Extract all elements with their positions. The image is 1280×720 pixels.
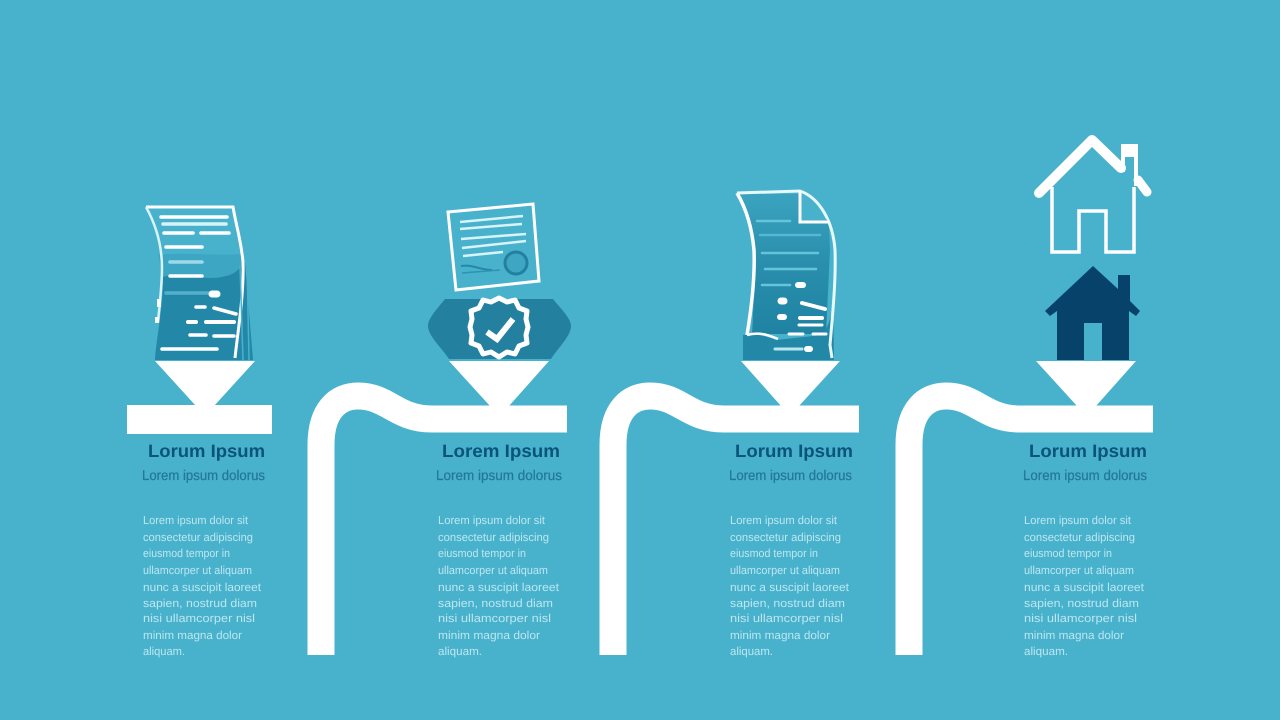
step 4 text: ullamcorper ut aliquam: [1024, 565, 1134, 577]
pointer triangle 3: [741, 361, 840, 406]
step 2 text: nisi ullamcorper nisl: [438, 613, 551, 625]
step 3 text: aliquam.: [730, 646, 773, 658]
step 3 text: nisi ullamcorper nisl: [730, 613, 843, 625]
icon: white outline house: [1039, 140, 1147, 252]
step 3 text: ullamcorper ut aliquam: [730, 565, 840, 577]
step 4 text: Lorem ipsum dolorus: [1023, 467, 1147, 483]
step 4 text: Lorum Ipsum: [1029, 441, 1147, 461]
icon: curved document: [146, 207, 253, 360]
pointer triangle 4: [1036, 361, 1136, 406]
step 1 text: Lorem ipsum dolor sit: [143, 515, 249, 527]
step 2 text: sapien, nostrud diam: [438, 598, 553, 610]
step 2 text: minim magna dolor: [438, 630, 540, 642]
step 4 text: minim magna dolor: [1024, 630, 1124, 642]
step 3 text: consectetur adipiscing: [730, 532, 841, 544]
step 2 text: consectetur adipiscing: [438, 532, 549, 544]
step 2 text: Lorem Ipsum: [442, 441, 560, 461]
step 1 text: Lorem ipsum dolorus: [142, 467, 265, 483]
step 1 text: sapien, nostrud diam: [143, 598, 257, 610]
step 2 connector pipe: [321, 396, 567, 655]
pointer triangle 1: [155, 361, 255, 406]
step 4 connector pipe: [909, 396, 1153, 655]
step 1 connector bar: [127, 405, 272, 434]
step 2 text: ullamcorper ut aliquam: [438, 565, 548, 577]
step 4 text: Lorem ipsum dolor sit: [1024, 515, 1132, 527]
step 2 text: Lorem ipsum dolor sit: [438, 515, 546, 527]
step 1 text: nisi ullamcorper nisl: [143, 613, 255, 625]
step 4 text: nisi ullamcorper nisl: [1024, 613, 1137, 625]
step 4 text: nunc a suscipit laoreet: [1024, 582, 1145, 594]
step 3 text: eiusmod tempor in: [730, 548, 818, 560]
step 3 text: nunc a suscipit laoreet: [730, 582, 850, 594]
step 2 text: Lorem ipsum dolorus: [436, 467, 562, 483]
step 2 text: [436, 441, 562, 658]
icon: dark navy house: [1045, 266, 1140, 360]
step 4 text: aliquam.: [1024, 646, 1068, 658]
step 3 text: Lorem ipsum dolor sit: [730, 515, 838, 527]
step 1 text: eiusmod tempor in: [143, 548, 230, 560]
step 2 text: nunc a suscipit laoreet: [438, 582, 560, 594]
step 4 text: consectetur adipiscing: [1024, 532, 1135, 544]
step 2 text: aliquam.: [438, 646, 482, 658]
icon: document with folded corner: [737, 191, 835, 360]
step 1 text: aliquam.: [143, 646, 185, 658]
step 1 text: nunc a suscipit laoreet: [143, 582, 262, 594]
step 4 text: eiusmod tempor in: [1024, 548, 1112, 560]
pointer triangle 2: [449, 361, 549, 406]
step 1 text: [142, 441, 265, 658]
icon: verified badge banner: [428, 298, 571, 359]
step 4 text: sapien, nostrud diam: [1024, 598, 1139, 610]
step 3 text: Lorum Ipsum: [735, 441, 853, 461]
step 1 text: minim magna dolor: [143, 630, 242, 642]
step 2 text: eiusmod tempor in: [438, 548, 526, 560]
step 3 connector pipe: [613, 396, 859, 655]
step 1 text: ullamcorper ut aliquam: [143, 565, 252, 577]
step 3 text: [729, 441, 853, 658]
step 3 text: Lorem ipsum dolorus: [729, 467, 852, 483]
step 1 text: consectetur adipiscing: [143, 532, 253, 544]
step 3 text: minim magna dolor: [730, 630, 830, 642]
step 1 text: Lorum Ipsum: [148, 441, 265, 461]
step 3 text: sapien, nostrud diam: [730, 598, 845, 610]
step 4 text: [1023, 441, 1147, 658]
icon: certificate: [448, 204, 539, 290]
